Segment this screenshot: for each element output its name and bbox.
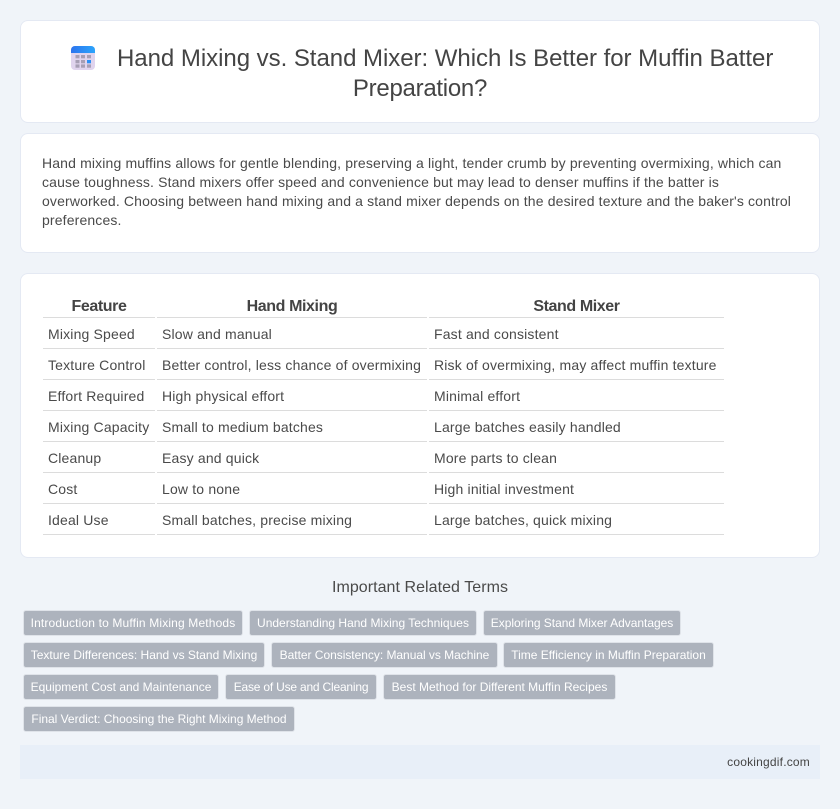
text: Easy and quick — [162, 450, 259, 466]
text: Batter Consistency: Manual vs Machine — [280, 648, 489, 662]
text: Exploring Stand Mixer Advantages — [491, 616, 673, 630]
intro paragraph: Hand mixing muffins allows for gentle blending, preserving a light, tender crumb by preventing overmixing, which can — [42, 155, 782, 171]
footer source: cookingdif.com — [727, 755, 810, 769]
text: Understanding Hand Mixing Techniques — [257, 616, 469, 630]
intro paragraph — [42, 155, 791, 228]
text: Cost — [48, 481, 77, 497]
text: Best Method for Different Muffin Recipes — [392, 680, 607, 694]
text: Time Efficiency in Muffin Preparation — [511, 648, 706, 662]
column heading: hand mixing: Hand Mixing — [247, 298, 337, 315]
text: Better control, less chance of overmixing — [162, 357, 421, 373]
icon: calendar — [71, 46, 95, 70]
text: Effort Required — [48, 388, 144, 404]
footer — [20, 745, 820, 779]
panel: header — [20, 20, 820, 123]
text: Fast and consistent — [434, 326, 559, 342]
text: High initial investment — [434, 481, 574, 497]
text: Slow and manual — [162, 326, 272, 342]
text: Large batches, quick mixing — [434, 512, 612, 528]
text: Ideal Use — [48, 512, 109, 528]
text: Equipment Cost and Maintenance — [31, 680, 211, 694]
column heading: stand mixer — [429, 297, 724, 318]
column heading: stand mixer: Stand Mixer — [533, 298, 620, 315]
heading: important related terms: Important Related Terms — [332, 579, 508, 596]
text: Texture Control — [48, 357, 145, 373]
text: Large batches easily handled — [434, 419, 621, 435]
column heading: hand mixing — [157, 297, 427, 318]
text: Introduction to Muffin Mixing Methods — [31, 616, 235, 630]
text: Small batches, precise mixing — [162, 512, 352, 528]
column heading: feature: Feature — [72, 298, 126, 315]
panel: intro text — [20, 133, 820, 253]
title: Preparation? — [353, 75, 487, 102]
tags — [23, 610, 723, 732]
text: Minimal effort — [434, 388, 520, 404]
text: Mixing Capacity — [48, 419, 149, 435]
intro paragraph: preferences. — [42, 212, 122, 228]
text: Ease of Use and Cleaning — [234, 680, 368, 694]
text: Texture Differences: Hand vs Stand Mixing — [31, 648, 257, 662]
intro paragraph: cause toughness. Stand mixers offer speed and convenience but may lead to denser muffins if the batter is — [42, 174, 719, 190]
text: Cleanup — [48, 450, 101, 466]
text: High physical effort — [162, 388, 284, 404]
text: Low to none — [162, 481, 240, 497]
column heading: feature — [43, 297, 155, 318]
title — [117, 45, 773, 102]
text: Final Verdict: Choosing the Right Mixing Method — [31, 712, 287, 726]
panel: comparison table — [20, 273, 820, 558]
comparison table — [43, 297, 724, 535]
text: Risk of overmixing, may affect muffin texture — [434, 357, 717, 373]
text: Mixing Speed — [48, 326, 135, 342]
text: More parts to clean — [434, 450, 557, 466]
intro paragraph: overworked. Choosing between hand mixing and a stand mixer depends on the desired texture and the baker's control — [42, 193, 791, 209]
text: Small to medium batches — [162, 419, 323, 435]
title: Hand Mixing vs. Stand Mixer: Which Is Better for Muffin Batter — [117, 45, 773, 72]
